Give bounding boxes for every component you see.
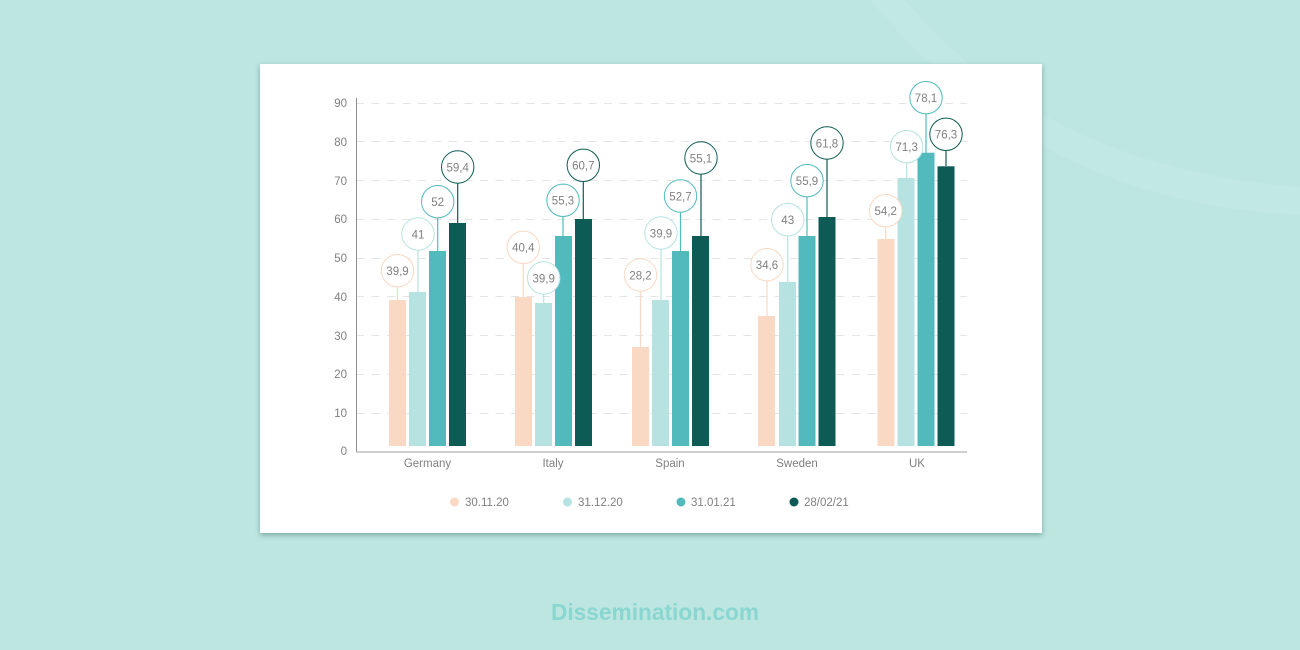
x axis: Sweden [776,458,818,470]
x axis: Germany [404,458,451,470]
legend [450,497,849,509]
group: Spain: 52,7 [669,191,692,203]
y axis: 40 [334,292,347,304]
x axis [356,452,967,470]
group: Germany [381,151,474,446]
x axis: UK [909,458,925,470]
legend: 31.12.20 [578,497,623,509]
x axis: Spain [655,458,685,470]
group: Italy [507,149,600,446]
group: Sweden: 43 [781,215,794,227]
y axis: 0 [341,446,347,458]
y axis: 90 [334,98,347,110]
group: Sweden: 61,8 [816,138,838,150]
group: UK: 71,3 [896,142,918,154]
group: Italy: 60,7 [572,161,594,173]
group: Germany: 52 [431,197,444,209]
group: Sweden: 55,9 [796,176,818,188]
group: Spain: 55,1 [690,153,712,165]
legend: 30.11.20 [465,497,509,509]
group: Sweden: 34,6 [756,260,778,272]
group: Italy: 55,3 [552,196,574,208]
y axis: 50 [334,253,347,265]
group: UK: 54,2 [875,206,897,218]
group: Germany: 59,4 [447,162,469,174]
y axis: 10 [334,408,347,420]
group: UK [870,82,962,446]
group: Italy: 40,4 [512,243,535,255]
brand wordmark: Dissemination.com [551,599,759,625]
group: Spain: 39,9 [650,228,672,240]
legend: 31.01.21 [691,497,736,509]
group: Spain [624,142,717,446]
group: Germany: 41 [412,229,424,241]
y axis [334,98,356,458]
group: Sweden [751,127,843,446]
y axis: 30 [334,331,347,343]
y axis: 70 [334,176,347,188]
group: Spain: 28,2 [629,270,652,282]
y axis: 20 [334,369,347,381]
group: UK: 76,3 [935,130,957,142]
group: UK: 78,1 [915,93,937,105]
y axis: 80 [334,137,347,149]
y axis: 60 [334,214,347,226]
x axis: Italy [542,458,564,470]
group: Germany: 39,9 [386,266,409,278]
legend: 28/02/21 [804,497,849,509]
panel: chart card [260,64,1042,533]
group: Italy: 39,9 [533,273,555,285]
